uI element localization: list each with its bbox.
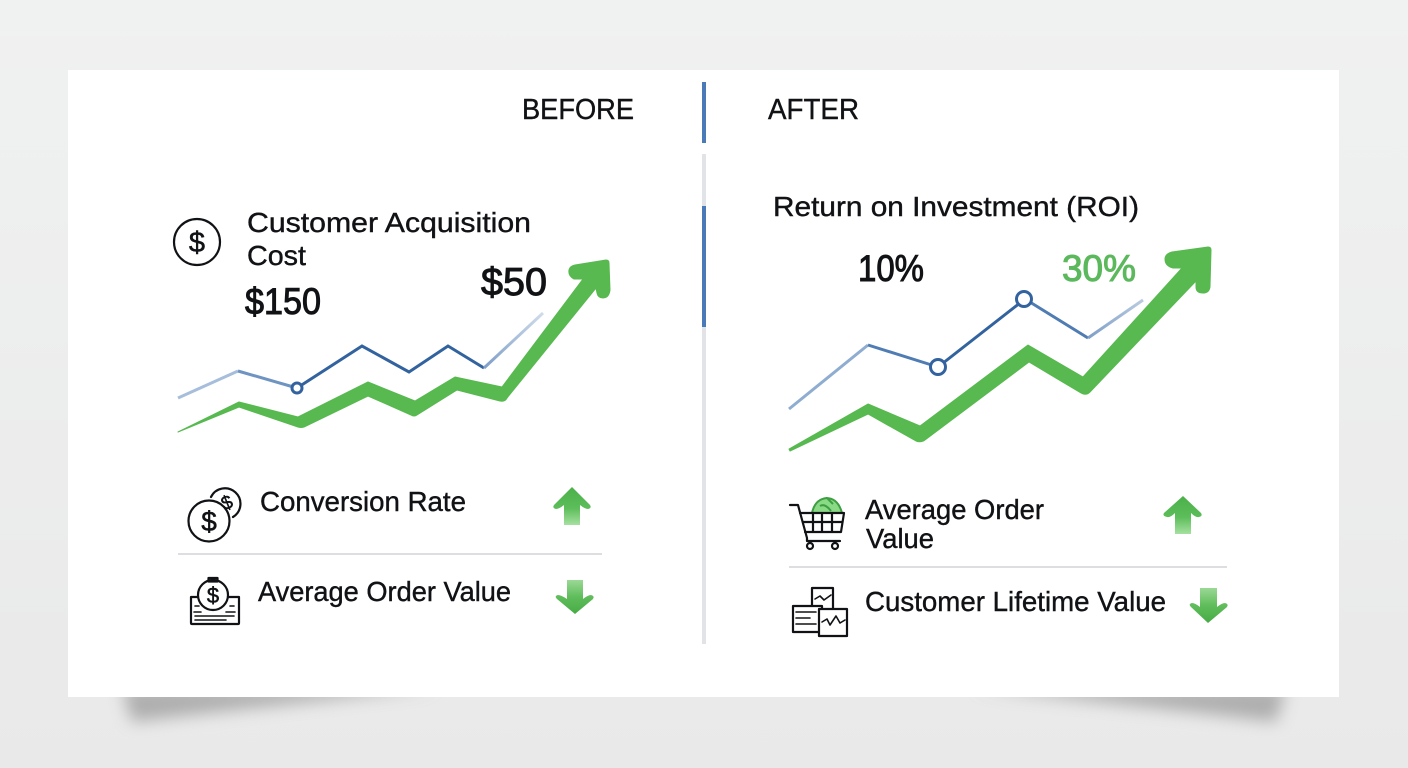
row: average order value	[790, 494, 1202, 554]
row divider	[178, 553, 602, 555]
value: 30%: 30%	[1062, 248, 1136, 289]
icon: shopping cart	[790, 498, 844, 549]
row: customer lifetime value	[793, 586, 1228, 636]
white card	[68, 70, 1339, 697]
blue line chart	[789, 292, 1143, 409]
label: average order value	[865, 494, 1044, 554]
arrow: up	[553, 487, 591, 525]
label: average order value: Value	[866, 523, 934, 554]
heading: after: AFTER	[768, 94, 859, 126]
panel: after	[773, 191, 1228, 636]
metric title: customer acquisition cost	[247, 207, 531, 271]
icon: dollar circle	[174, 219, 220, 265]
card shadow	[122, 688, 1286, 722]
panel: before	[174, 207, 610, 624]
value: $50: $50	[481, 261, 547, 304]
label: customer lifetime value: Customer Lifetime Value	[865, 586, 1166, 617]
center divider	[702, 82, 706, 644]
icon: coins	[188, 488, 240, 542]
value: 10%: 10%	[858, 248, 924, 289]
icon: coins: $	[218, 492, 236, 515]
icon: money and stopwatch: $	[207, 583, 219, 608]
label: average order value: Average Order Value	[258, 576, 511, 607]
arrow: up	[1163, 496, 1202, 534]
row: conversion rate	[188, 486, 591, 542]
icon: dollar circle: $	[189, 227, 205, 259]
row: average order value	[191, 576, 594, 624]
metric title: customer acquisition cost: Cost	[247, 240, 306, 271]
arrow: down	[1190, 588, 1228, 623]
green trend arrow	[178, 260, 610, 432]
metric title: return on investment: Return on Investment (ROI)	[773, 191, 1139, 222]
green trend arrow	[789, 247, 1211, 451]
row divider	[789, 566, 1227, 568]
icon: money and stopwatch	[191, 578, 239, 624]
icon: chart documents	[793, 588, 847, 636]
value: $150: $150	[245, 281, 321, 322]
metric title: customer acquisition cost: Customer Acquisition	[247, 207, 531, 238]
heading: before: BEFORE	[522, 94, 634, 126]
label: conversion rate: Conversion Rate	[260, 486, 466, 517]
arrow: down	[556, 580, 594, 614]
label: average order value: Average Order	[865, 494, 1044, 525]
icon: coins: $	[201, 506, 217, 537]
blue line chart	[178, 313, 543, 398]
